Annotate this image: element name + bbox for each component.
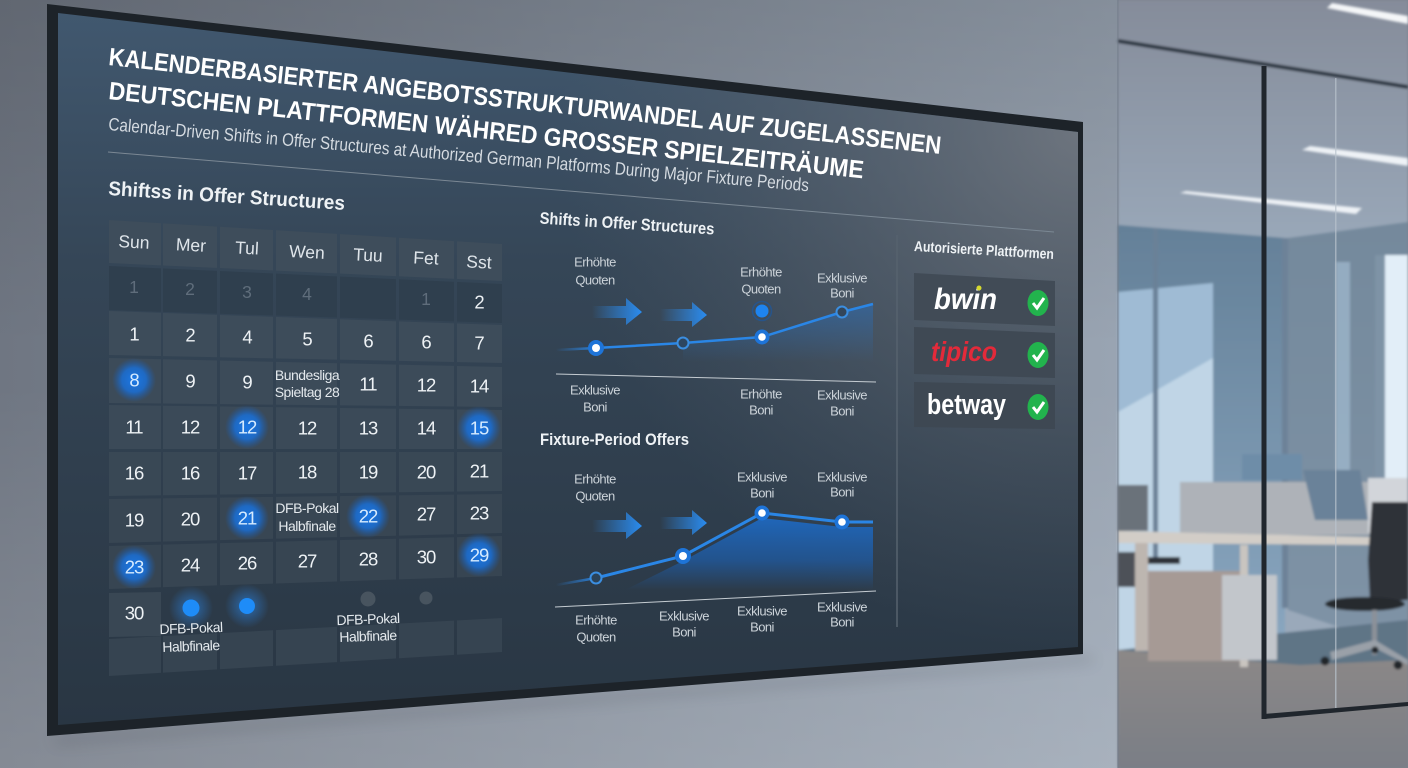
- day numbers: 5: [302, 328, 312, 350]
- day numbers: 2: [185, 324, 195, 346]
- lower labels: Quoten: [576, 630, 616, 644]
- lower labels: Erhöhte: [740, 386, 782, 402]
- upper labels: Quoten: [575, 488, 615, 504]
- display bezel: [47, 4, 1083, 736]
- day numbers: 7: [474, 332, 484, 354]
- day numbers: 24: [181, 554, 200, 576]
- day numbers: 9: [242, 372, 252, 392]
- day numbers: 19: [359, 462, 378, 482]
- background: office behind glass: [1118, 0, 1408, 768]
- upper labels: Exklusive: [737, 470, 787, 484]
- day numbers: 11: [125, 416, 143, 438]
- upper labels: Erhöhte: [574, 472, 616, 486]
- upper labels: Erhöhte: [574, 254, 616, 270]
- title: DEUTSCHEN PLATTFORMEN WÄHRED GROSSER SPIELZEITRÄUME: [107, 77, 865, 184]
- ceiling lights: [1180, 3, 1408, 214]
- day numbers: 20: [417, 462, 436, 482]
- panel: authorized platforms: [914, 239, 1055, 429]
- day numbers: 21: [238, 508, 257, 528]
- day numbers: 1: [129, 324, 139, 344]
- panel: chart shifts in offer structures: [539, 210, 876, 418]
- event label: DFB-Pokal row 4: Halbfinale: [278, 518, 336, 534]
- platform: betway: [914, 382, 1055, 429]
- day numbers: 11: [359, 374, 377, 394]
- day numbers: 26: [238, 552, 257, 574]
- event label: DFB-Pokal row 4: DFB-Pokal: [275, 500, 339, 516]
- day numbers: 14: [470, 376, 489, 396]
- event markers: [169, 584, 432, 630]
- lower labels: Exklusive: [659, 608, 709, 624]
- axis: [555, 591, 876, 607]
- lower labels: Boni: [583, 400, 608, 414]
- platforms heading: Autorisierte Plattformen: [914, 239, 1054, 263]
- day numbers: 9: [185, 370, 195, 392]
- day numbers: 4: [302, 284, 312, 304]
- day numbers: 16: [181, 462, 200, 484]
- lower labels: Exklusive: [817, 388, 867, 402]
- event label: DFB-Pokal lower left: DFB-Pokal: [159, 619, 223, 637]
- day numbers: 1: [421, 289, 431, 309]
- day numbers: 14: [417, 418, 436, 438]
- day numbers: 3: [242, 282, 252, 302]
- day numbers: 6: [421, 332, 431, 352]
- day numbers: 28: [359, 548, 378, 570]
- display shadow: [50, 656, 1095, 745]
- upper labels: Exklusive: [817, 470, 867, 484]
- day numbers: 6: [363, 330, 373, 352]
- data points: [588, 302, 848, 356]
- day numbers: 2: [185, 279, 195, 299]
- lower labels: Boni: [830, 614, 855, 630]
- event label: DFB-Pokal lower right: DFB-Pokal: [336, 610, 400, 628]
- day numbers: 30: [417, 546, 436, 568]
- event label: DFB-Pokal lower right: Halbfinale: [339, 627, 398, 645]
- day numbers: 21: [470, 460, 489, 482]
- platform: tipico: [914, 327, 1055, 378]
- weekday headers: [118, 231, 492, 273]
- day numbers: 4: [242, 326, 252, 348]
- day numbers: 17: [238, 462, 257, 484]
- subtitle: Calendar-Driven Shifts in Offer Structures at Authorized German Platforms During Major Fixture Periods: [108, 114, 810, 195]
- weekday headers: Sst: [466, 251, 492, 273]
- arrows: [592, 298, 707, 327]
- lower labels: Boni: [749, 402, 774, 418]
- weekday headers: Fet: [413, 247, 439, 269]
- event label: DFB-Pokal lower left: [159, 619, 223, 655]
- lower labels: Erhöhte: [575, 612, 617, 628]
- day numbers: [125, 277, 489, 624]
- event label: Bundesliga: Bundesliga: [275, 367, 340, 383]
- day numbers: 23: [470, 502, 489, 524]
- upper labels: Boni: [830, 286, 855, 300]
- calendar heading: Shiftss in Offer Structures: [108, 178, 346, 215]
- day numbers: 1: [129, 277, 139, 297]
- weekday headers: Wen: [289, 241, 325, 263]
- upper labels: Exklusive: [817, 270, 867, 286]
- day numbers: 20: [181, 508, 200, 530]
- platform: tipico: tipico: [931, 336, 997, 367]
- panel: calendar: [108, 178, 502, 676]
- lower labels: Exklusive: [737, 604, 787, 618]
- day numbers: 2: [474, 292, 484, 312]
- title: KALENDERBASIERTER ANGEBOTSSTRUKTURWANDEL AUF ZUGELASSENEN: [107, 43, 943, 160]
- platform: bwin: bwin: [934, 283, 997, 316]
- arrows: [592, 510, 707, 539]
- day numbers: 12: [298, 418, 317, 438]
- event label: DFB-Pokal lower right: [336, 610, 400, 645]
- area and line: [556, 304, 873, 362]
- day numbers: 8: [129, 370, 139, 390]
- event label: Bundesliga: [275, 367, 340, 400]
- day numbers: 29: [470, 544, 489, 566]
- day numbers: 13: [359, 418, 378, 438]
- lower labels: Boni: [672, 624, 697, 640]
- day numbers: 12: [181, 416, 200, 438]
- axis: [556, 374, 876, 382]
- day numbers: 15: [470, 418, 489, 438]
- platform: betway: betway: [927, 389, 1006, 421]
- lower labels: [570, 382, 867, 418]
- day numbers: 18: [298, 462, 317, 482]
- chart heading: Shifts in Offer Structures: [539, 210, 715, 238]
- lower labels: Boni: [750, 620, 775, 634]
- lower labels: Boni: [830, 404, 855, 418]
- glass frame: [1117, 0, 1408, 768]
- data points: [590, 506, 850, 584]
- upper labels: Boni: [750, 486, 775, 500]
- lower labels: [575, 600, 867, 644]
- upper labels: Quoten: [575, 272, 615, 288]
- day numbers: 27: [417, 504, 436, 524]
- day numbers: 23: [125, 556, 144, 578]
- lower labels: Exklusive: [570, 382, 620, 398]
- chart heading: Fixture-Period Offers: [540, 431, 689, 449]
- upper labels: [574, 470, 867, 504]
- day numbers: 30: [125, 602, 144, 624]
- upper labels: [574, 254, 867, 300]
- calendar cells: [109, 220, 502, 676]
- event label: DFB-Pokal lower left: Halbfinale: [162, 637, 221, 655]
- highlighted day glows: [112, 358, 501, 589]
- background: wall: [0, 0, 1118, 768]
- day numbers: 19: [125, 510, 144, 530]
- day numbers: 12: [238, 416, 257, 438]
- lower labels: Exklusive: [817, 600, 867, 614]
- weekday headers: Tul: [235, 237, 259, 259]
- weekday headers: Sun: [118, 231, 150, 253]
- display screen: [58, 13, 1078, 725]
- weekday headers: Mer: [175, 234, 207, 256]
- upper labels: Erhöhte: [740, 264, 782, 280]
- event label: Bundesliga: Spieltag 28: [275, 384, 340, 400]
- day numbers: 16: [125, 462, 144, 484]
- day numbers: 27: [298, 550, 317, 572]
- upper labels: Quoten: [741, 282, 781, 296]
- day numbers: 22: [359, 506, 378, 526]
- day numbers: 12: [417, 374, 436, 396]
- event label: DFB-Pokal row 4: [275, 500, 339, 534]
- upper labels: Boni: [830, 484, 855, 500]
- area and line: [556, 513, 873, 590]
- platform: bwin: [914, 273, 1055, 326]
- panel: chart fixture period offers: [540, 431, 876, 644]
- weekday headers: Tuu: [353, 244, 383, 266]
